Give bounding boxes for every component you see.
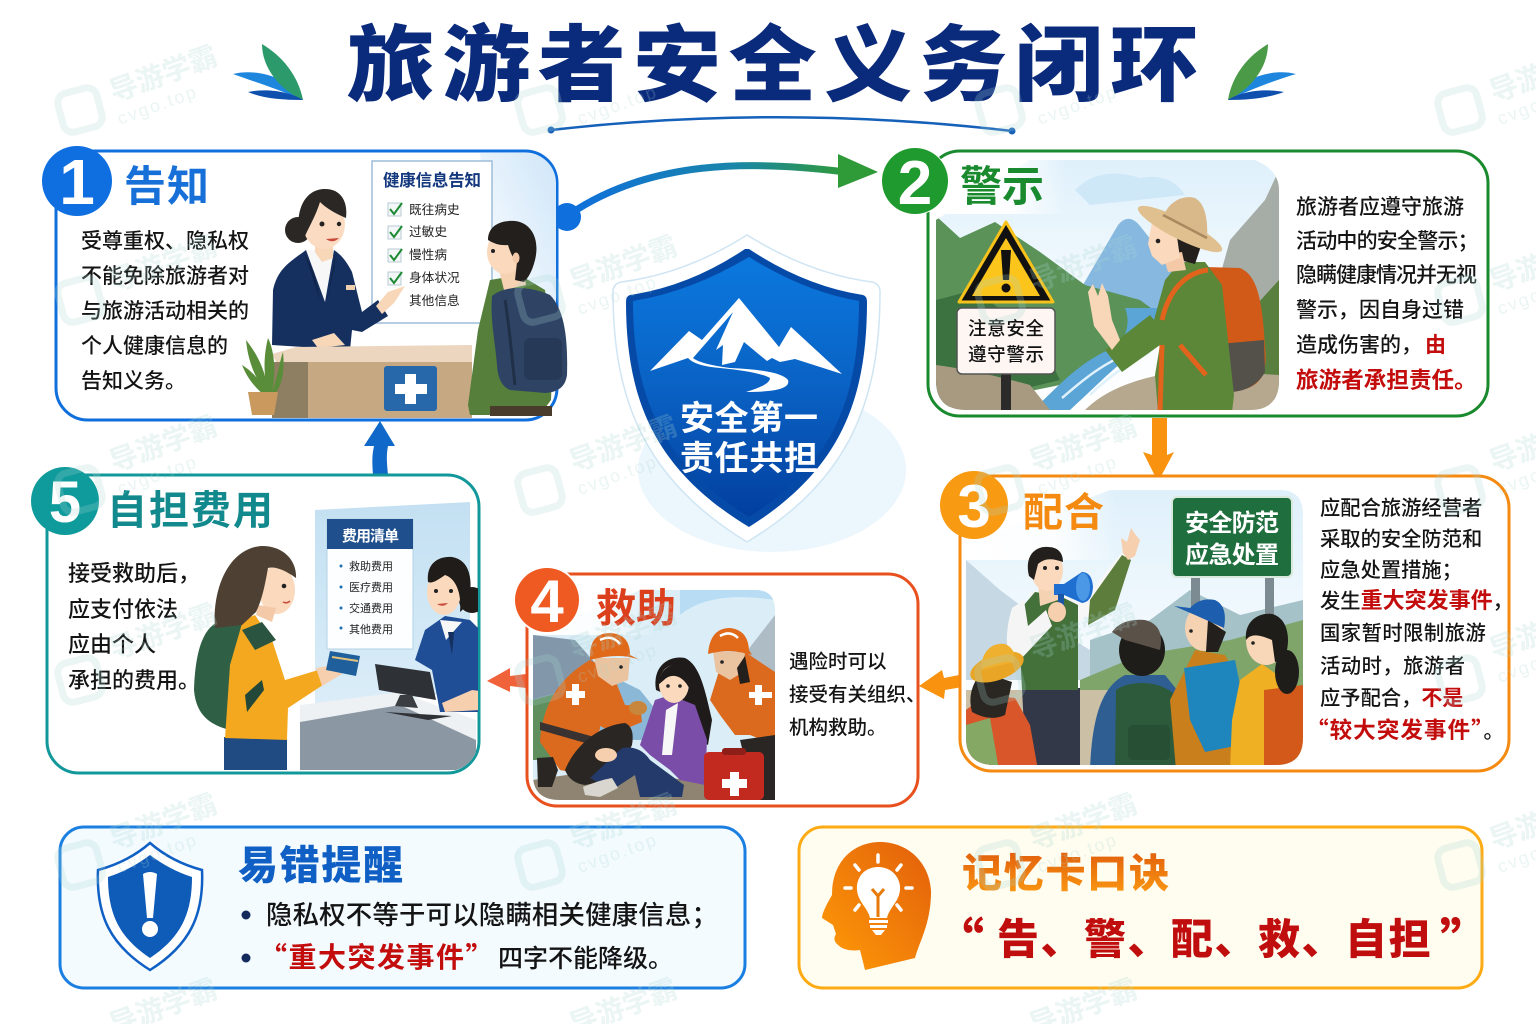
text: step 3 body: 活动时，旅游者 (1320, 649, 1465, 679)
watermark: cvgo.top (115, 81, 200, 129)
text: step 1 body: 个人健康信息的 (81, 335, 228, 358)
illustration: mountain river scene (936, 160, 1279, 412)
text: step 1 body: 与旅游活动相关的 (81, 300, 249, 323)
text: step 5 body: 应由个人 (68, 632, 156, 657)
health info board: 身体状况 (409, 270, 460, 285)
text: step 3 body: 应予配合，不是 (1320, 681, 1463, 712)
watermark: 导游学霸 (565, 598, 681, 666)
illustration: reception desk (272, 345, 472, 418)
panel: step 3 配合 (940, 471, 1513, 771)
text: step 5 body (68, 561, 200, 693)
text: step 2 body: 警示，因自身过错 (1296, 299, 1464, 322)
shield slogan (680, 400, 818, 478)
number badge 3 (940, 471, 1008, 540)
watermark: cvgo.top (575, 639, 660, 687)
illustration: safety briefing scene (966, 490, 1303, 770)
heading 易错提醒: 易错提醒 (238, 844, 403, 888)
text: step 1 body: 受尊重权、隐私权 (81, 230, 249, 253)
heading 自担费用: 自担费用 (107, 489, 273, 533)
illustration: tourist dark cap (1090, 620, 1176, 765)
number badge 2: 2 (898, 149, 932, 218)
arrow: step 3 to 4 (919, 670, 974, 699)
watermark: cvgo.top (575, 271, 660, 319)
watermark: cvgo.top (115, 451, 200, 499)
text: mnemonic: 告、警、配、救、自担 (997, 906, 1432, 967)
heading 配合: 配合 (1023, 491, 1104, 535)
watermark: 导游学霸 (565, 410, 681, 478)
illustration: service counter wall (315, 502, 470, 703)
watermark: 导游学霸 (105, 788, 221, 856)
text: step 3 body: 采取的安全防范和 (1320, 522, 1482, 552)
icon: white mountain (650, 298, 842, 392)
text: mnemonic: ” (1440, 903, 1490, 975)
text: step 3 body: “较大突发事件”。 (1306, 712, 1504, 745)
text: step 3 body: 国家暂时限制旅游 (1320, 616, 1486, 646)
central shield (613, 235, 906, 552)
illustration: warning sign: 遵守警示 (968, 344, 1044, 365)
heading 记忆卡口诀: 记忆卡口诀 (962, 852, 1169, 896)
text: step 5 body: 应支付依法 (68, 597, 178, 622)
panel: step 1 告知 (42, 146, 567, 420)
text: step 1 body: 不能免除旅游者对 (81, 265, 249, 288)
text: step 4 body: 机构救助。 (789, 717, 887, 739)
watermark: 导游学霸 (105, 410, 221, 478)
illustration: warning sign: 注意安全 (968, 318, 1044, 339)
watermark: cvgo.top (1035, 81, 1120, 129)
number badge 4 (513, 566, 581, 635)
illustration: clerk (415, 556, 478, 712)
text: step 1 body (81, 230, 249, 393)
illustration: customer woman (194, 546, 342, 770)
illustration: bank card (326, 651, 360, 676)
text: mnemonic: “ (934, 903, 984, 975)
health info board (372, 161, 492, 323)
text: step 5 body: 接受救助后， (68, 561, 200, 586)
illustration: guide with megaphone (1007, 528, 1140, 770)
text: step 4 body: 遇险时可以 (789, 651, 887, 673)
illustration: first aid kit (704, 748, 764, 800)
text: step 3 body: 应配合旅游经营者 (1320, 491, 1482, 521)
number badge 5: 5 (49, 470, 81, 535)
illustration: warning sign (957, 222, 1055, 412)
watermark: 导游学霸 (565, 230, 681, 298)
health info board: 健康信息告知 (383, 170, 481, 190)
panel: step 5 自担费用 (31, 467, 495, 773)
watermark: 导游学霸 (1025, 788, 1141, 856)
arrow: step 5 to 1 (364, 421, 395, 475)
arrow: step 4 to 5 (487, 668, 526, 692)
illustration: reception woman (272, 189, 405, 350)
text: step 2 body: 旅游者承担责任。 (1296, 368, 1477, 393)
text: step 3 body: 应急处置措施； (1320, 553, 1462, 583)
number badge 3: 3 (957, 473, 991, 540)
illustration: counter desk (300, 692, 476, 770)
health info board: 慢性病 (409, 247, 447, 262)
text: step 2 body: 旅游者应遵守旅游 (1296, 196, 1464, 219)
fee list board: 交通费用 (349, 601, 393, 615)
number badge 1 (42, 146, 112, 218)
panel: memory card (799, 827, 1490, 988)
illustration: green direction sign: 应急处置 (1185, 542, 1279, 569)
watermark: 导游学霸 (1025, 230, 1141, 298)
illustration: tourist yellow hat (966, 644, 1038, 770)
number badge 1: 1 (59, 146, 95, 218)
health info board: 既往病史 (409, 203, 460, 217)
text: step 1 body: 告知义务。 (81, 370, 186, 393)
panel: common mistakes (60, 827, 745, 988)
watermark: 导游学霸 (565, 788, 681, 856)
text: step 5 body: 承担的费用。 (68, 668, 200, 693)
text: mistake 2: “重大突发事件” (259, 936, 495, 976)
watermark: 导游学霸 (105, 230, 221, 298)
title underline (548, 117, 1016, 134)
text: step 2 body: 活动中的安全警示； (1296, 230, 1478, 253)
illustration: green direction sign (1172, 497, 1292, 625)
number badge 4: 4 (530, 568, 564, 635)
illustration: tourist man (468, 221, 567, 416)
watermark: cvgo.top (115, 829, 200, 877)
watermark: 导游学霸 (1025, 410, 1141, 478)
icon: left leaves (233, 44, 303, 100)
illustration: plant (242, 338, 284, 415)
illustration: hiker (1088, 197, 1266, 412)
health info board: 过敏史 (409, 225, 447, 239)
text: step 3 body: 发生重大突发事件， (1320, 583, 1513, 615)
fee list board (327, 519, 413, 649)
illustration: injured woman (583, 657, 712, 797)
illustration: monitor (375, 664, 452, 720)
number badge 2 (881, 147, 949, 218)
text: mnemonic (934, 903, 1490, 975)
fee list board: 医疗费用 (349, 580, 393, 594)
illustration: tourist blue cap (1170, 599, 1245, 770)
watermark: cvgo.top (575, 451, 660, 499)
number badge 5 (31, 467, 99, 535)
arrow: step 2 to 3 (1143, 418, 1174, 482)
illustration: tourist woman (1230, 614, 1303, 770)
text: step 2 body: 造成伤害的，由 (1296, 334, 1446, 357)
text: step 2 body: 隐瞒健康情况并无视 (1296, 264, 1477, 287)
text: mistake 2: 四字不能降级。 (498, 939, 673, 975)
watermark: 导游学霸 (105, 40, 221, 108)
text: step 2 body (1296, 196, 1478, 393)
text: mistake 2 (242, 936, 673, 976)
panel: step 4 救助 (513, 566, 926, 806)
text: step 4 body (789, 651, 926, 739)
illustration: rescuer left (537, 633, 647, 787)
watermark: cvgo.top (1035, 451, 1120, 499)
watermark: 导游学霸 (1025, 598, 1141, 666)
watermark: cvgo.top (1035, 829, 1120, 877)
icon: warning shield (98, 843, 202, 970)
illustration: rescue scene (533, 590, 775, 800)
illustration: green direction sign: 安全防范 (1185, 510, 1279, 537)
heading 警示: 警示 (960, 163, 1044, 210)
panel: step 2 警示 (881, 147, 1488, 416)
text: mistake 1: 隐私权不等于可以隐瞒相关健康信息； (266, 900, 718, 930)
fee list board: 费用清单 (342, 527, 399, 545)
fee list board: 其他费用 (349, 623, 393, 636)
illustration: rescuer right (708, 628, 775, 800)
title: 旅游者安全义务闭环 (347, 20, 1198, 112)
icon: right leaves (1228, 44, 1296, 100)
icon: head with light bulb (822, 842, 931, 970)
shield slogan: 责任共担 (680, 440, 818, 478)
watermark: cvgo.top (575, 829, 660, 877)
heading 救助: 救助 (596, 587, 676, 631)
heading 告知: 告知 (124, 163, 209, 210)
shield slogan: 安全第一 (680, 400, 818, 438)
health info board: 其他信息 (409, 293, 460, 308)
text: step 3 body (1306, 491, 1513, 745)
text: step 4 body: 接受有关组织、 (789, 684, 926, 706)
watermark: cvgo.top (575, 81, 660, 129)
fee list board: 救助费用 (349, 559, 393, 573)
arrow: step 1 to 2 (553, 154, 878, 231)
watermark: 导游学霸 (105, 598, 221, 666)
